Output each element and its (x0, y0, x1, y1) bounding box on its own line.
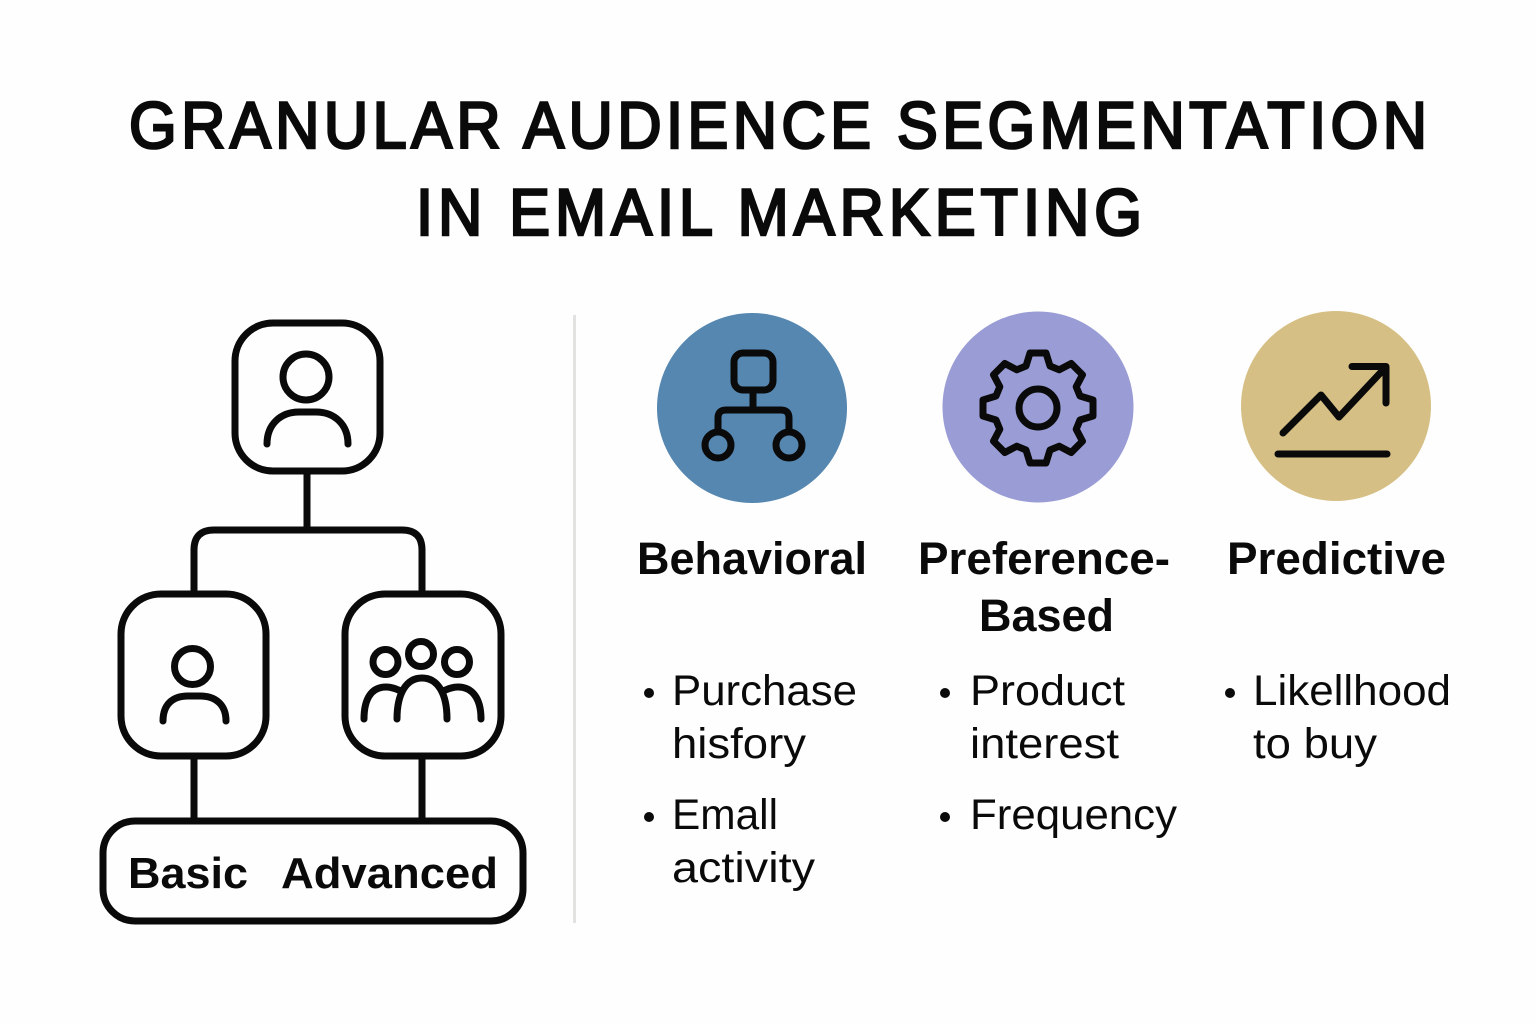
heading (918, 533, 1170, 641)
connector lines (194, 472, 422, 821)
bullet list: Emall (672, 791, 778, 839)
icon: rising chart (1241, 311, 1431, 501)
bullet list: hisfory (672, 720, 807, 768)
bullet list (644, 667, 857, 892)
heading: Preference- (918, 533, 1170, 584)
title: IN EMAIL MARKETING (416, 175, 1142, 249)
column: predictive (1225, 311, 1451, 768)
label box: basic and advanced (103, 821, 523, 921)
column: behavioral (637, 313, 867, 892)
title (129, 88, 1427, 249)
heading: Based (979, 590, 1114, 641)
title: GRANULAR AUDIENCE SEGMENTATION (129, 88, 1427, 162)
heading: Predictive (1227, 533, 1446, 584)
icon: gear (942, 312, 1134, 502)
label box: basic and advanced: Basic (128, 849, 248, 898)
column: preference-based (918, 312, 1177, 839)
bullet list: activity (672, 844, 816, 892)
label box: basic and advanced: Advanced (281, 849, 498, 898)
heading: Behavioral (637, 533, 867, 584)
bullet list: Frequency (970, 791, 1177, 839)
bullet list: Purchase (672, 667, 857, 715)
divider (573, 315, 576, 923)
bullet list: Product (970, 667, 1125, 715)
hierarchy diagram (103, 323, 523, 921)
icon: advanced group box (345, 594, 501, 756)
icon: basic user box (121, 594, 266, 756)
icon: network (657, 313, 847, 503)
bullet list (1225, 667, 1451, 768)
bullet list (940, 667, 1177, 839)
bullet list: Likellhood (1253, 667, 1451, 715)
icon: top user box (235, 323, 380, 471)
bullet list: interest (970, 720, 1119, 768)
bullet list: to buy (1253, 720, 1378, 768)
